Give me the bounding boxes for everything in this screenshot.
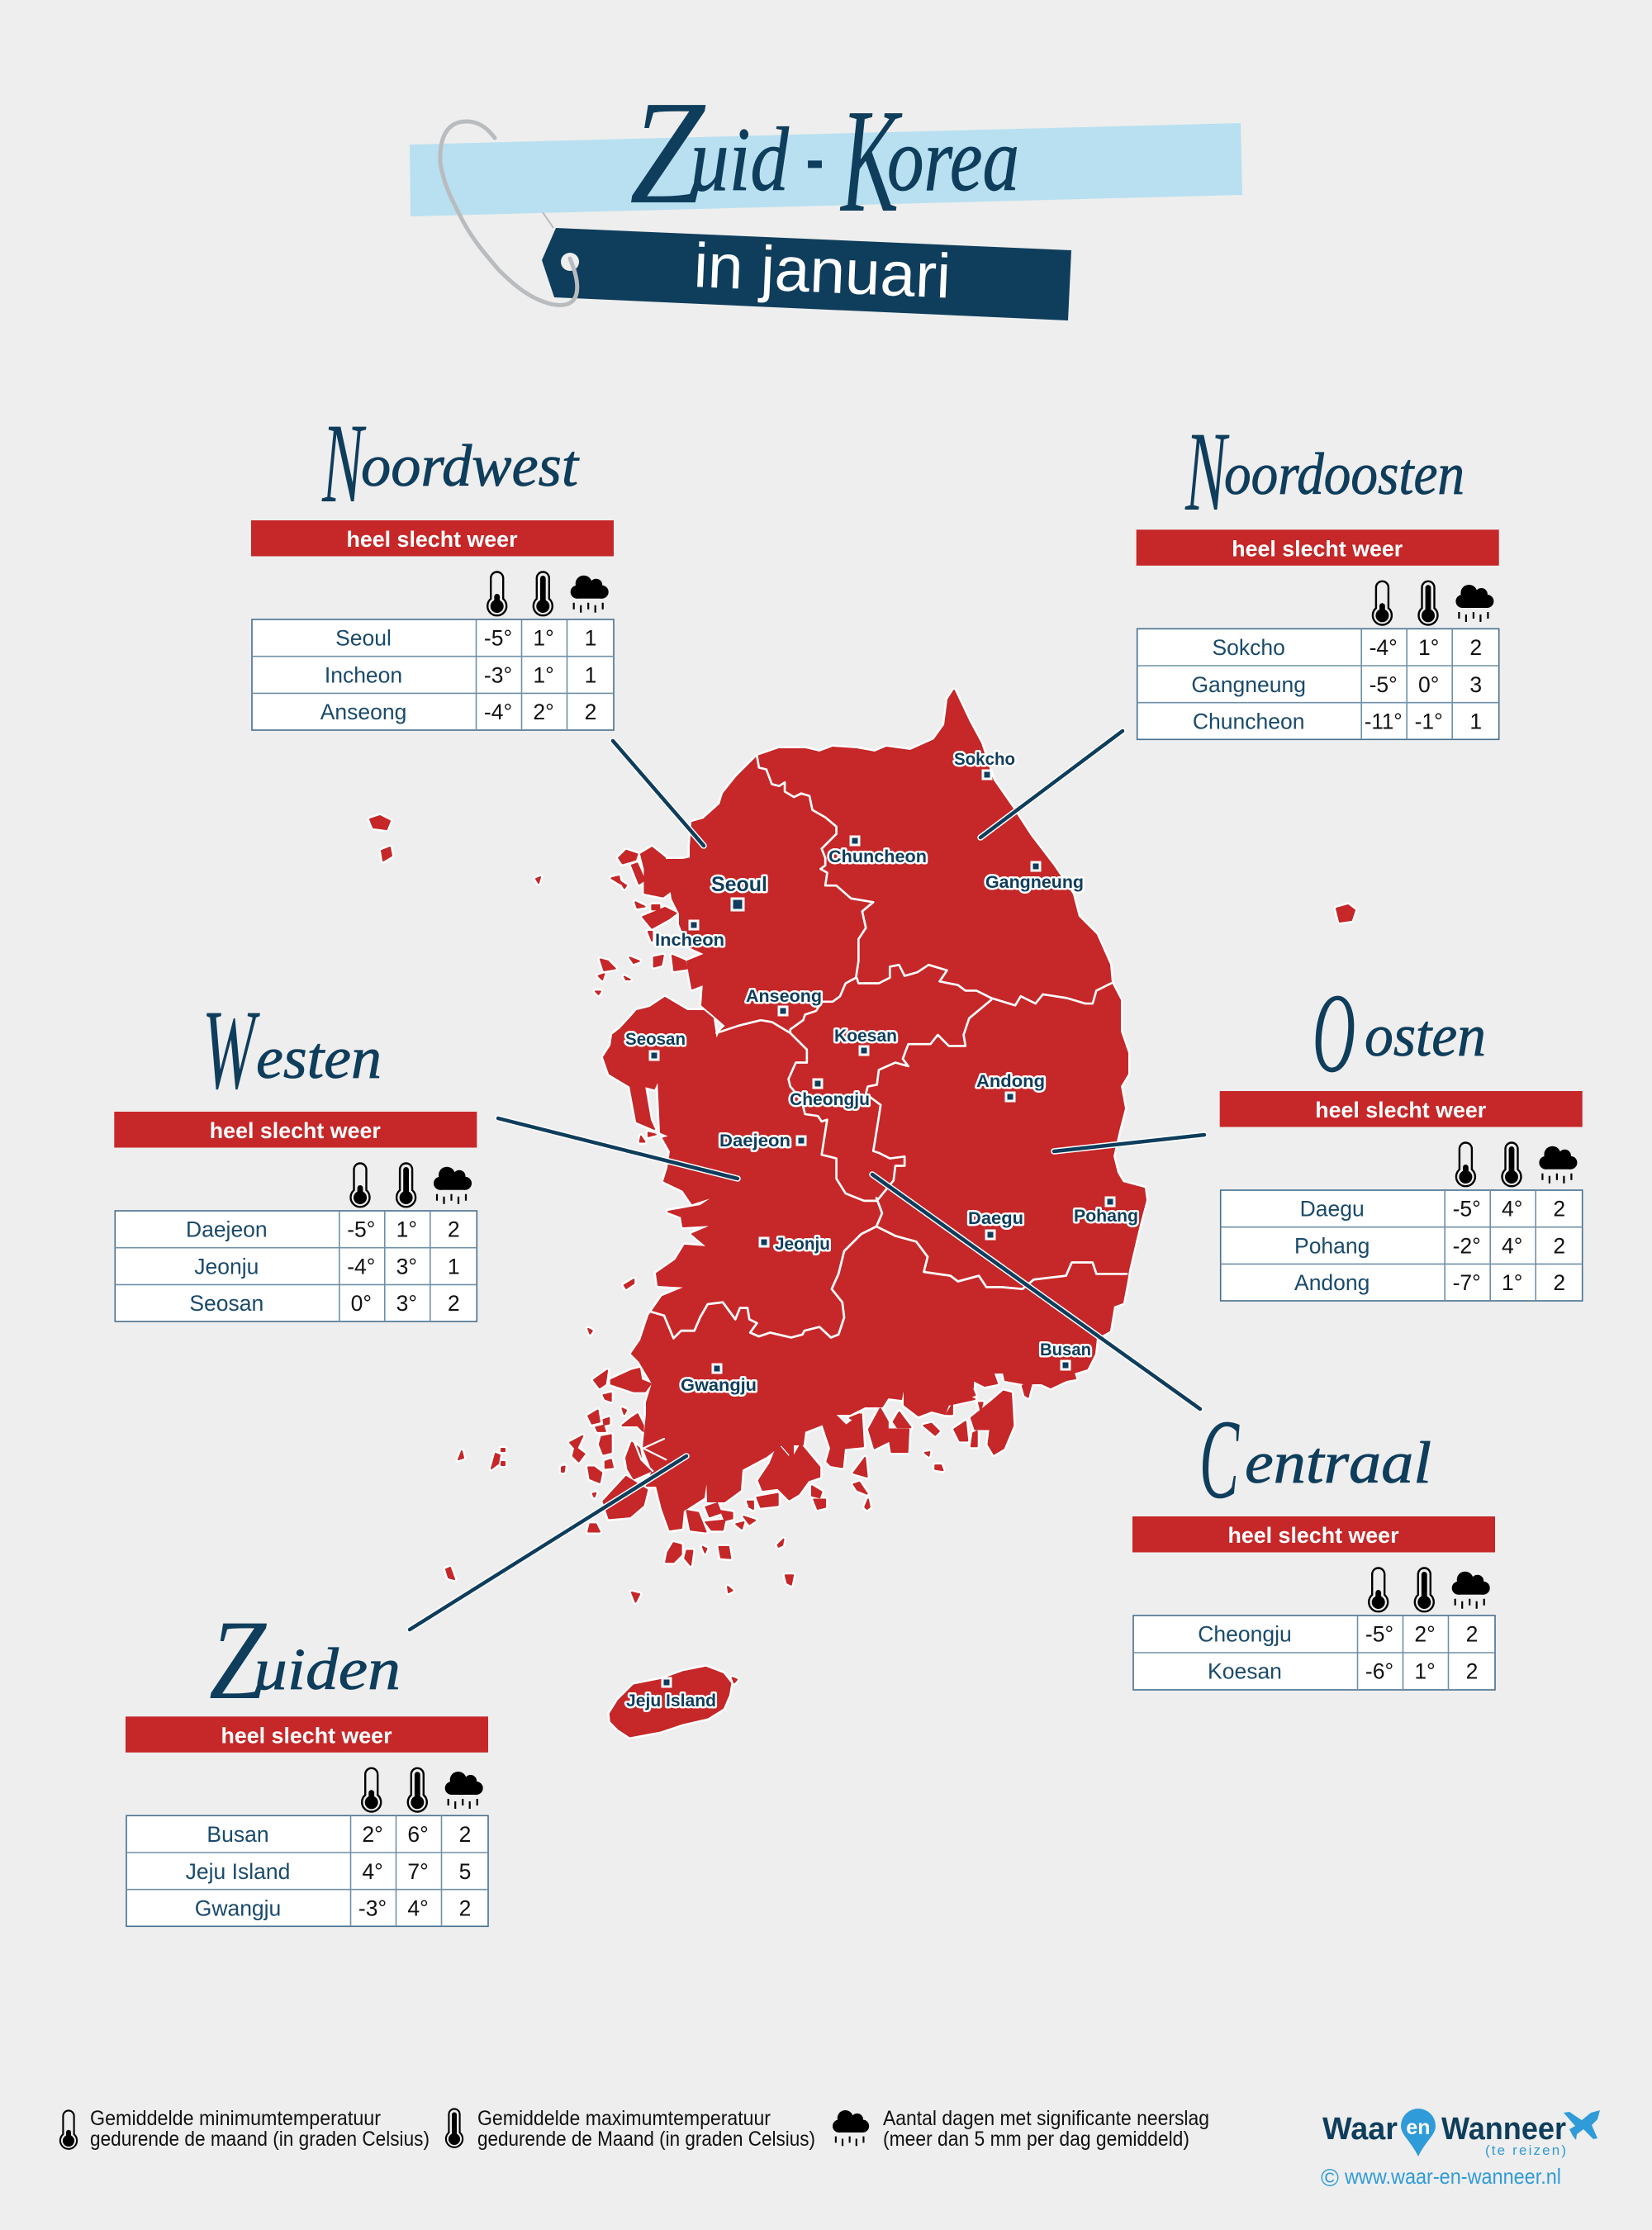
table values: -6° — [1365, 1658, 1393, 1683]
heading: Westen: esten — [256, 1025, 382, 1091]
rating bar — [114, 1112, 477, 1148]
table grid — [126, 1815, 488, 1926]
weather table: Noordoosten — [1137, 529, 1499, 739]
table values: Seosan — [189, 1291, 263, 1316]
table grid — [252, 619, 614, 730]
table grid — [115, 1211, 477, 1321]
table values: 1 — [585, 626, 596, 651]
legend text: min temperature: gedurende de maand (in graden Celsius) — [90, 2128, 430, 2151]
icon: rain — [1455, 585, 1493, 622]
navy tag — [542, 228, 1071, 320]
table values: 6° — [407, 1822, 429, 1847]
table values: 1 — [585, 662, 596, 687]
table values: Andong — [1294, 1270, 1370, 1295]
heading: Noordwest: oordwest — [361, 433, 580, 499]
logo: Waar en Wanneer — [1321, 2109, 1600, 2192]
heading: Centraal: C — [1199, 1396, 1240, 1522]
table values: 1° — [1502, 1270, 1522, 1295]
table values: Anseong — [320, 700, 406, 724]
table values: -3° — [358, 1896, 387, 1920]
table values: 2 — [1553, 1197, 1565, 1222]
city: Andong — [976, 1072, 1045, 1101]
land halo — [370, 690, 1355, 1736]
table values: 4° — [1502, 1234, 1522, 1259]
heading: Noordoosten — [1184, 408, 1464, 534]
table values: 4° — [362, 1859, 383, 1884]
city markers and labels — [625, 750, 1138, 1710]
table values: -7° — [1453, 1270, 1481, 1295]
title: Zuid-Korea — [629, 70, 1019, 243]
city: Sokcho: Sokcho — [954, 750, 1015, 769]
table values: Daegu — [1300, 1197, 1365, 1222]
table grid — [1221, 1190, 1583, 1301]
table values: 2° — [1414, 1622, 1436, 1647]
table values: Gwangju — [195, 1896, 281, 1920]
city: Busan — [1040, 1340, 1091, 1369]
legend text: rain — [883, 2107, 1209, 2151]
city: Seosan: Seosan — [625, 1030, 686, 1049]
panel: Centraal — [1132, 1396, 1495, 1690]
leader line: Zuiden — [410, 1456, 686, 1630]
table values: Gangneung — [1191, 672, 1306, 697]
logo wordmark left: Waar — [1322, 2112, 1398, 2147]
light blue title band — [410, 123, 1242, 216]
table values: Pohang — [1294, 1234, 1370, 1259]
icon: max temperature — [1419, 581, 1437, 625]
table values: Jeju Island — [186, 1859, 290, 1884]
weather table: Westen — [114, 1112, 477, 1321]
weather table: Centraal — [1132, 1516, 1495, 1690]
title: Zuid-Korea: Z — [629, 70, 706, 235]
legend icon: max temperature — [446, 2109, 463, 2147]
city: Chuncheon — [828, 837, 927, 866]
table values: Sokcho — [1213, 635, 1285, 660]
table values: Chuncheon — [1193, 709, 1304, 733]
icon: max temperature — [1502, 1143, 1521, 1186]
leader line: Westen — [498, 1118, 738, 1179]
table values: Daejeon — [186, 1217, 268, 1242]
panel: Zuiden — [126, 1597, 488, 1926]
weather table: Zuiden — [126, 1716, 488, 1926]
city: Jeju Island: Jeju Island — [626, 1691, 716, 1710]
leader line: Noordoosten — [980, 731, 1123, 837]
icon: max temperature — [396, 1163, 415, 1207]
icon: min temperature — [487, 572, 506, 615]
logo tagline: (te reizen) — [1485, 2142, 1566, 2158]
table values: -4° — [1370, 635, 1398, 660]
panel: Oosten — [1220, 970, 1583, 1301]
table grid — [1133, 1616, 1495, 1690]
heading: Zuiden: uiden — [254, 1636, 401, 1702]
table values: 3 — [1469, 672, 1482, 697]
city: Daegu: Daegu — [968, 1209, 1023, 1228]
logo pin — [1401, 2109, 1436, 2156]
table values: 2 — [1466, 1622, 1478, 1647]
table values — [186, 1822, 471, 1920]
table values: 1 — [1469, 709, 1482, 733]
land fill — [370, 690, 1355, 1736]
legend icon: min temperature — [60, 2110, 77, 2149]
icon: rain — [571, 576, 609, 613]
icon: min temperature — [362, 1768, 381, 1812]
table values: Cheongju — [1198, 1622, 1292, 1647]
city: Anseong: Anseong — [746, 987, 822, 1006]
leader line: Noordwest — [613, 741, 704, 846]
city: Cheongju — [790, 1079, 870, 1109]
regional boundaries: south — [634, 1198, 1127, 1471]
heading: Oosten — [1313, 970, 1486, 1096]
table values: 2 — [1466, 1658, 1478, 1683]
icon: max temperature — [534, 572, 553, 615]
table values: -4° — [484, 700, 512, 724]
legend text: max temperature: gedurende de Maand (in graden Celsius) — [477, 2128, 815, 2151]
table values: 2 — [1553, 1270, 1565, 1295]
table values: 1° — [396, 1217, 417, 1242]
heading: Noordwest — [321, 400, 580, 526]
table values: Jeonju — [194, 1254, 259, 1279]
heading: Centraal — [1199, 1396, 1431, 1522]
table values: 5 — [459, 1859, 471, 1884]
rating bar — [1220, 1091, 1583, 1127]
tag string — [543, 212, 553, 228]
icon: min temperature — [350, 1163, 370, 1207]
heading: Zuiden — [209, 1597, 401, 1723]
rating text: heel slecht weer — [1315, 1098, 1487, 1122]
icon: min temperature — [1456, 1143, 1475, 1186]
map of South Korea — [370, 690, 1355, 1736]
table values: -5° — [1365, 1622, 1393, 1647]
city: Chuncheon: Chuncheon — [828, 847, 927, 866]
table values: -5° — [484, 626, 512, 651]
icon: min temperature — [1373, 581, 1392, 625]
table values: 2 — [459, 1822, 471, 1847]
title: Zuid-Korea: K — [839, 78, 903, 243]
weather table: Oosten — [1220, 1091, 1583, 1301]
table values: 7° — [407, 1859, 429, 1884]
city: Sokcho — [954, 750, 1015, 779]
panel: Noordoosten — [1137, 408, 1499, 739]
legend text: max temperature: Gemiddelde maximumtemperatuur — [477, 2107, 771, 2130]
table values: 1° — [1418, 635, 1439, 660]
table values — [1294, 1197, 1565, 1295]
table values: -3° — [484, 662, 512, 687]
rating bar — [251, 520, 614, 557]
leader line: Oosten — [1054, 1135, 1204, 1151]
legend text: rain: (meer dan 5 mm per dag gemiddeld) — [883, 2128, 1189, 2151]
city: Seosan — [625, 1030, 686, 1060]
regional boundaries: north and centre — [716, 757, 1111, 1201]
table values: 1° — [1414, 1658, 1436, 1683]
tag hole — [561, 253, 579, 271]
icon: rain — [1452, 1572, 1490, 1609]
icon: max temperature — [1415, 1568, 1434, 1611]
table values: 1° — [533, 626, 554, 651]
heading: Oosten: osten — [1365, 1003, 1486, 1069]
table values: -2° — [1453, 1234, 1481, 1259]
table grid — [1137, 629, 1499, 739]
heading: Westen: W — [202, 986, 260, 1113]
rating text: heel slecht weer — [1232, 536, 1403, 561]
table values: -5° — [347, 1217, 375, 1242]
title: Zuid-Korea: orea — [887, 109, 1019, 210]
table values: -4° — [347, 1254, 375, 1279]
table values: 2° — [362, 1822, 383, 1847]
table values: 2 — [585, 700, 596, 724]
table values: -5° — [1453, 1197, 1481, 1222]
heading: Noordwest: N — [321, 400, 367, 526]
heading: Noordoosten: N — [1184, 408, 1230, 534]
logo wordmark right: Wanneer — [1441, 2112, 1566, 2147]
city: Daejeon: Daejeon — [719, 1132, 790, 1151]
city: Incheon — [655, 921, 724, 950]
icon: rain — [434, 1167, 472, 1204]
table values: 2 — [448, 1291, 460, 1316]
legend text: min temperature: Gemiddelde minimumtemperatuur — [90, 2107, 381, 2130]
table values: 2° — [533, 700, 554, 724]
city: Busan: Busan — [1040, 1340, 1091, 1359]
rating text: heel slecht weer — [221, 1723, 392, 1748]
table values: 2 — [459, 1896, 471, 1920]
city: Seoul: Seoul — [711, 873, 767, 896]
heading: Oosten: O — [1313, 970, 1355, 1096]
title block — [410, 70, 1242, 320]
title: Zuid-Korea: uid — [691, 109, 790, 210]
city: Jeju Island — [626, 1678, 716, 1710]
heading: Westen — [202, 986, 382, 1113]
city: Pohang — [1074, 1198, 1138, 1226]
rating bar — [126, 1716, 488, 1753]
rating text: heel slecht weer — [210, 1118, 381, 1143]
table values: 2 — [448, 1217, 460, 1242]
icon: min temperature — [1369, 1568, 1388, 1611]
website: www.waar-en-wanneer.nl — [1344, 2164, 1561, 2189]
rating bar — [1137, 529, 1499, 566]
table values — [186, 1217, 460, 1316]
city: Seoul — [711, 873, 767, 910]
table values: -11° — [1365, 709, 1403, 733]
table values: 1 — [448, 1254, 460, 1279]
heading: Zuiden: Z — [209, 1597, 267, 1723]
table values: Seoul — [335, 626, 392, 651]
table values: 3° — [396, 1291, 417, 1316]
city: Anseong — [746, 987, 822, 1015]
grey tag ring — [440, 121, 577, 305]
city: Gwangju: Gwangju — [681, 1376, 757, 1395]
table values: Koesan — [1208, 1658, 1282, 1683]
subtitle: in januari: in januari — [692, 230, 952, 312]
leader line: Centraal — [872, 1174, 1200, 1409]
city: Gangneung: Gangneung — [985, 873, 1084, 892]
title: Zuid-Korea: - — [806, 105, 824, 206]
panel: Westen — [114, 986, 477, 1321]
legend text: min temperature — [90, 2107, 430, 2151]
heading: Noordoosten: oordoosten — [1224, 441, 1464, 507]
table values: -1° — [1415, 709, 1443, 733]
city: Andong: Andong — [976, 1072, 1045, 1091]
rating text: heel slecht weer — [347, 527, 518, 552]
city: Gwangju — [681, 1364, 757, 1395]
heading: Centraal: entraal — [1245, 1430, 1431, 1496]
city: Koesan — [834, 1027, 897, 1055]
table values: 2 — [1553, 1234, 1565, 1259]
city: Cheongju: Cheongju — [790, 1090, 870, 1109]
rating text: heel slecht weer — [1227, 1523, 1399, 1548]
table values — [1191, 635, 1482, 733]
logo pin text: en — [1406, 2116, 1431, 2139]
legend — [60, 2107, 1209, 2151]
city: Daegu — [968, 1209, 1023, 1239]
table values: 0° — [351, 1291, 372, 1316]
city: Koesan: Koesan — [834, 1027, 897, 1046]
weather table: Noordwest — [251, 520, 614, 730]
legend text: max temperature — [477, 2107, 815, 2151]
table values: 3° — [396, 1254, 417, 1279]
icon: rain — [1539, 1146, 1577, 1184]
table values: 4° — [407, 1896, 429, 1920]
table values: Incheon — [325, 662, 402, 687]
legend icon: rain — [833, 2110, 869, 2146]
city: Jeonju: Jeonju — [775, 1235, 830, 1254]
icon: max temperature — [408, 1768, 427, 1812]
city: Gangneung — [985, 862, 1084, 892]
city: Pohang: Pohang — [1074, 1207, 1138, 1226]
icon: rain — [445, 1772, 483, 1809]
table values: 0° — [1418, 672, 1439, 697]
panel: Noordwest — [251, 400, 614, 730]
table values — [1198, 1622, 1478, 1683]
table values: -5° — [1370, 672, 1398, 697]
table values — [320, 626, 596, 724]
table values: 4° — [1502, 1197, 1522, 1222]
logo airplane — [1564, 2110, 1600, 2140]
table values: 2 — [1469, 635, 1482, 660]
website: © — [1321, 2165, 1339, 2192]
legend text: rain: Aantal dagen met significante neerslag — [883, 2107, 1209, 2130]
table values: Busan — [206, 1822, 269, 1847]
table values: 1° — [533, 662, 554, 687]
rating bar — [1132, 1516, 1495, 1553]
city: Incheon: Incheon — [655, 931, 724, 950]
